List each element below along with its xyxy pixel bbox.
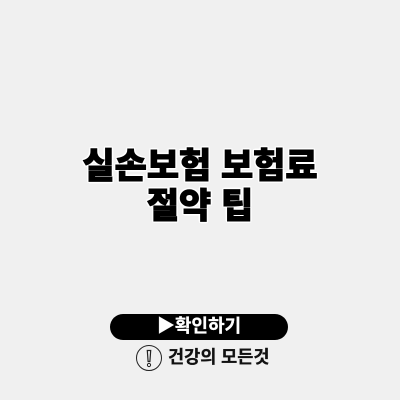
title [82,146,318,226]
icon: exclamation mark in circle [136,345,162,371]
title: 실손보험 보험료 [82,147,318,186]
brand caption [136,345,269,371]
button: confirm: ▶확인하기 [157,316,241,336]
button: confirm [110,314,288,340]
title: 절약 팁 [147,187,253,226]
brand name: 건강의 모든것 [168,347,269,367]
